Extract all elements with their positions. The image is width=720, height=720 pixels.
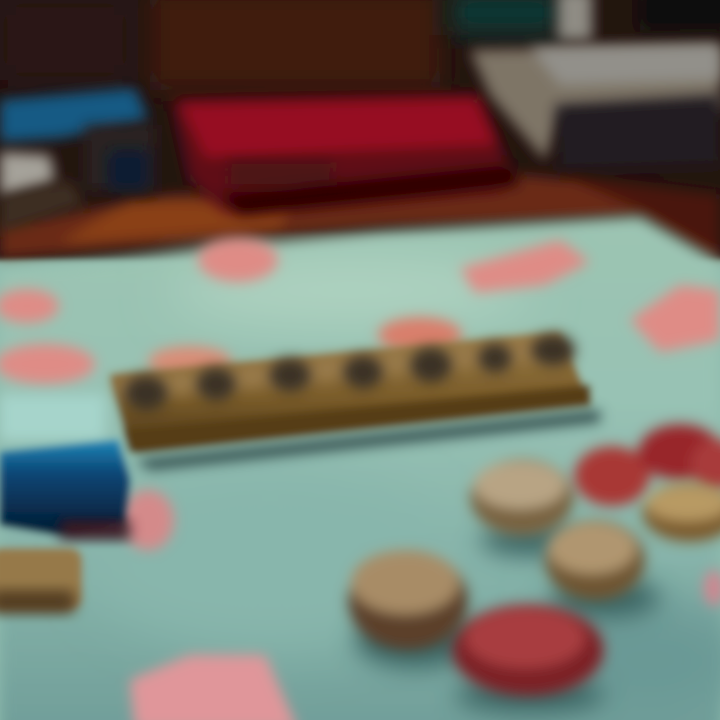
- rack slots: [124, 334, 575, 411]
- wooden tile: far right: [642, 482, 720, 542]
- mat shading: [90, 255, 720, 720]
- teal game mat: [0, 216, 720, 720]
- wooden tile: bottom left: [0, 548, 82, 614]
- wooden floor: [0, 175, 720, 262]
- red tiles: right: [574, 424, 720, 506]
- blue block stack: [0, 440, 130, 540]
- white table on the right: [470, 44, 720, 170]
- red couch: [172, 95, 520, 215]
- background: dark room: [0, 0, 720, 260]
- tile shadows: [355, 524, 660, 713]
- scattered wooden and red tiles: [348, 424, 720, 713]
- wooden tile: bottom centre: [348, 550, 468, 650]
- wooden tile: centre right: [545, 520, 645, 600]
- red tile: bottom centre: [452, 604, 604, 696]
- pink heart spots on the mat: [0, 238, 720, 720]
- wooden tile rack: [110, 332, 600, 470]
- blue shelf and white stack on the left: [0, 88, 155, 232]
- light teal band on the left: [0, 395, 105, 440]
- wooden tile: upper right: [470, 459, 574, 535]
